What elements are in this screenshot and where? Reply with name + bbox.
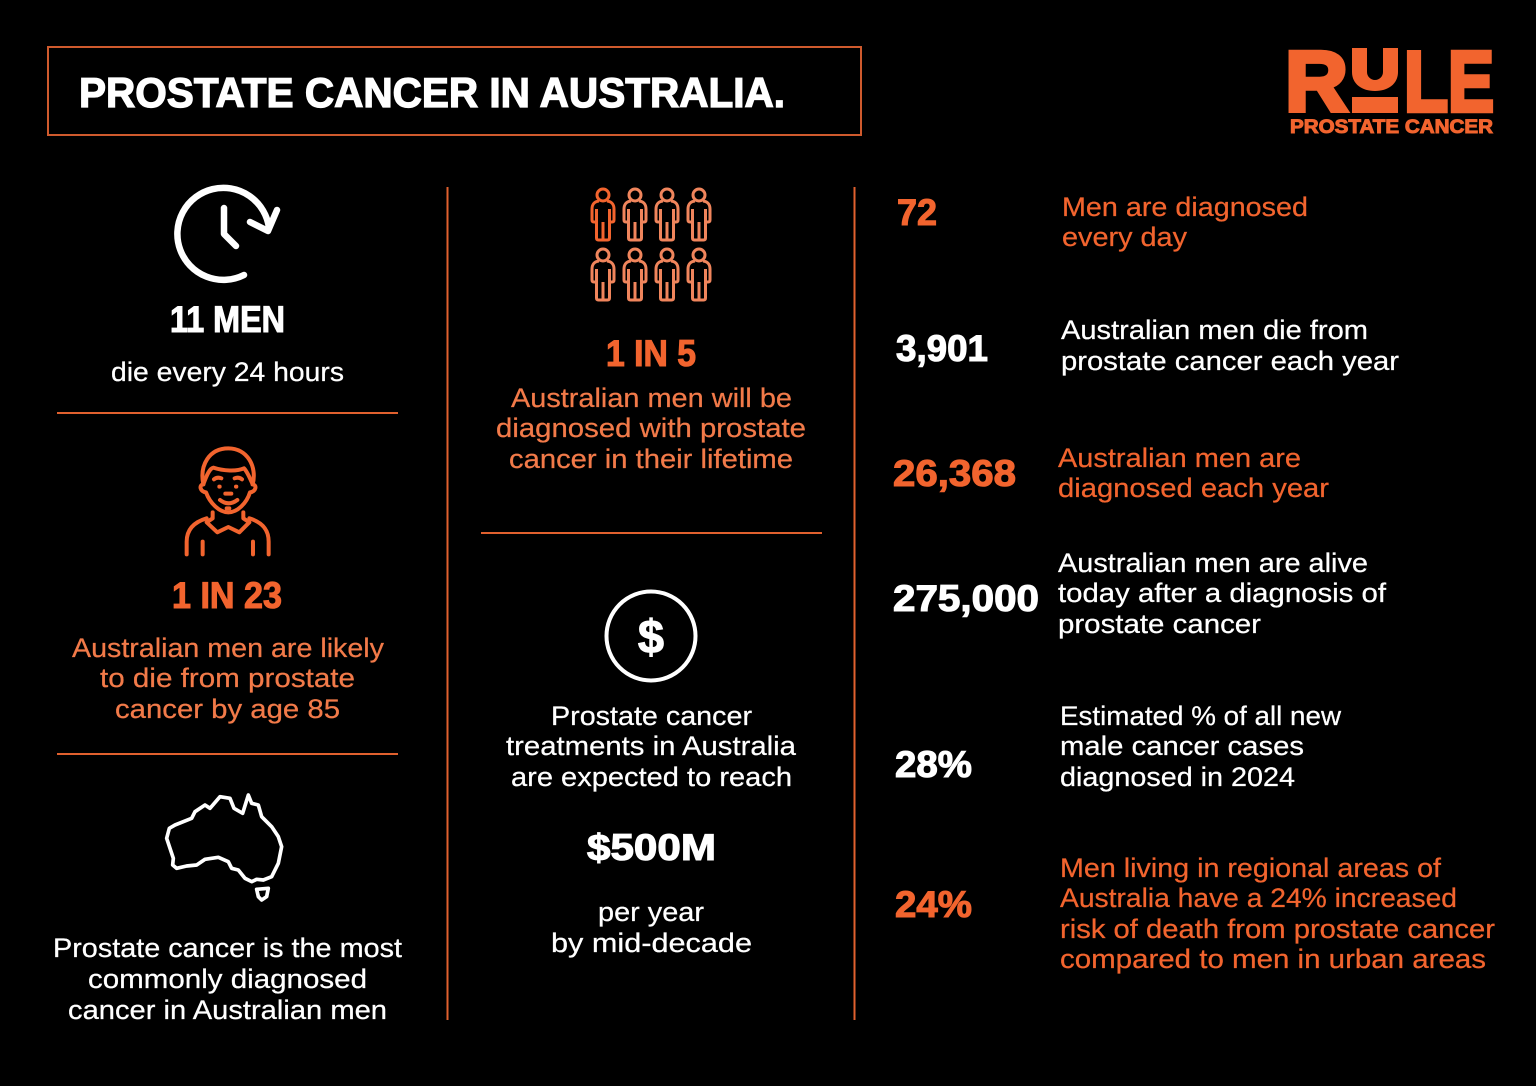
icon: dollar coin: $ <box>638 610 664 663</box>
column dividers <box>57 187 854 1020</box>
text: regional risk: risk of death from prostate cancer <box>1060 914 1495 944</box>
text: diagnosed each year <box>1058 443 1329 503</box>
text: likely to die: to die from prostate <box>100 663 355 693</box>
text: diagnosed every day <box>1062 192 1308 252</box>
row: 72 <box>897 192 1308 252</box>
text: die each year <box>1061 315 1399 376</box>
stat: 24%: 24% <box>895 884 972 925</box>
text: alive today: Australian men are alive <box>1058 548 1368 578</box>
icon: man portrait <box>187 448 269 554</box>
title: PROSTATE CANCER IN AUSTRALIA. <box>79 69 785 116</box>
text: diagnosed in lifetime: diagnosed with prostate <box>496 413 806 443</box>
text: alive today: prostate cancer <box>1058 609 1261 639</box>
icon: clock <box>177 188 277 280</box>
text: diagnosed in lifetime <box>496 383 806 474</box>
text: diagnosed each year: diagnosed each year <box>1058 473 1329 503</box>
text: die each year: Australian men die from <box>1061 315 1368 345</box>
text: most commonly diagnosed <box>53 933 403 1025</box>
stat: 3,901: 3,901 <box>896 328 988 369</box>
stat: 28%: 28% <box>895 744 972 785</box>
text: new male cases: Estimated % of all new <box>1060 701 1342 731</box>
text: treatments expected: Prostate cancer <box>551 701 752 731</box>
stat: 1 in 23: 1 IN 23 <box>172 575 282 616</box>
text: diagnosed in lifetime: cancer in their lifetime <box>509 444 793 474</box>
row: 28% <box>895 701 1342 792</box>
logo: Rule Prostate Cancer: E <box>1448 35 1494 130</box>
text: new male cases: male cancer cases <box>1060 731 1304 761</box>
icon: dollar coin <box>606 592 696 680</box>
title box <box>48 47 861 135</box>
row: 275,000 <box>893 548 1387 639</box>
text: likely to die: cancer by age 85 <box>115 694 340 724</box>
text: treatments expected: treatments in Australia <box>506 731 797 761</box>
logo: Rule Prostate Cancer: R <box>1285 35 1348 130</box>
text: regional risk: Australia have a 24% increased <box>1060 883 1457 913</box>
row: 26,368 <box>893 443 1329 503</box>
logo: Rule Prostate Cancer <box>1285 35 1494 138</box>
text: regional risk: compared to men in urban areas <box>1060 944 1486 974</box>
text: treatments expected <box>506 701 797 792</box>
text: per year <box>551 897 752 958</box>
text: most commonly diagnosed: cancer in Australian men <box>68 995 387 1025</box>
stat: 26,368: 26,368 <box>893 453 1016 494</box>
text: diagnosed every day: every day <box>1062 222 1188 252</box>
panel: treatment cost <box>506 592 797 958</box>
logo: Rule Prostate Cancer: PROSTATE CANCER <box>1290 117 1493 138</box>
icon: map of Australia <box>167 795 282 900</box>
text: new male cases: diagnosed in 2024 <box>1060 762 1295 792</box>
text: new male cases <box>1060 701 1342 792</box>
row: 24% <box>895 853 1495 974</box>
text: most commonly diagnosed: commonly diagnosed <box>88 964 367 994</box>
text: diagnosed each year: Australian men are <box>1058 443 1301 473</box>
panel: 11 men <box>111 188 344 387</box>
stat: 1 in 5: 1 IN 5 <box>606 333 696 374</box>
stat: $500M: $500M <box>587 827 716 868</box>
text: likely to die: Australian men are likely <box>72 633 385 663</box>
text: per year: per year <box>598 897 704 927</box>
icon: eight men <box>592 189 710 300</box>
text: likely to die <box>72 633 385 724</box>
text: diagnosed in lifetime: Australian men will be <box>511 383 792 413</box>
text: per year: by mid-decade <box>551 928 752 958</box>
row: 3,901 <box>896 315 1399 376</box>
stat: 11 men: 11 MEN <box>170 299 285 340</box>
text: alive today: today after a diagnosis of <box>1058 578 1387 608</box>
text: regional risk <box>1060 853 1495 974</box>
text: alive today <box>1058 548 1387 639</box>
text: die every 24 hours: die every 24 hours <box>111 357 344 387</box>
text: most commonly diagnosed: Prostate cancer is the most <box>53 933 403 963</box>
text: die each year: prostate cancer each year <box>1061 346 1399 376</box>
panel: 1 in 5 <box>496 189 806 474</box>
text: regional risk: Men living in regional areas of <box>1060 853 1442 883</box>
text: treatments expected: are expected to reach <box>511 762 792 792</box>
stat: 72: 72 <box>897 192 937 233</box>
stat: 275,000: 275,000 <box>893 578 1039 619</box>
panel: most commonly diagnosed <box>53 795 403 1025</box>
logo: Rule Prostate Cancer: L <box>1404 35 1448 130</box>
panel: 1 in 23 <box>72 448 385 724</box>
text: diagnosed every day: Men are diagnosed <box>1062 192 1308 222</box>
